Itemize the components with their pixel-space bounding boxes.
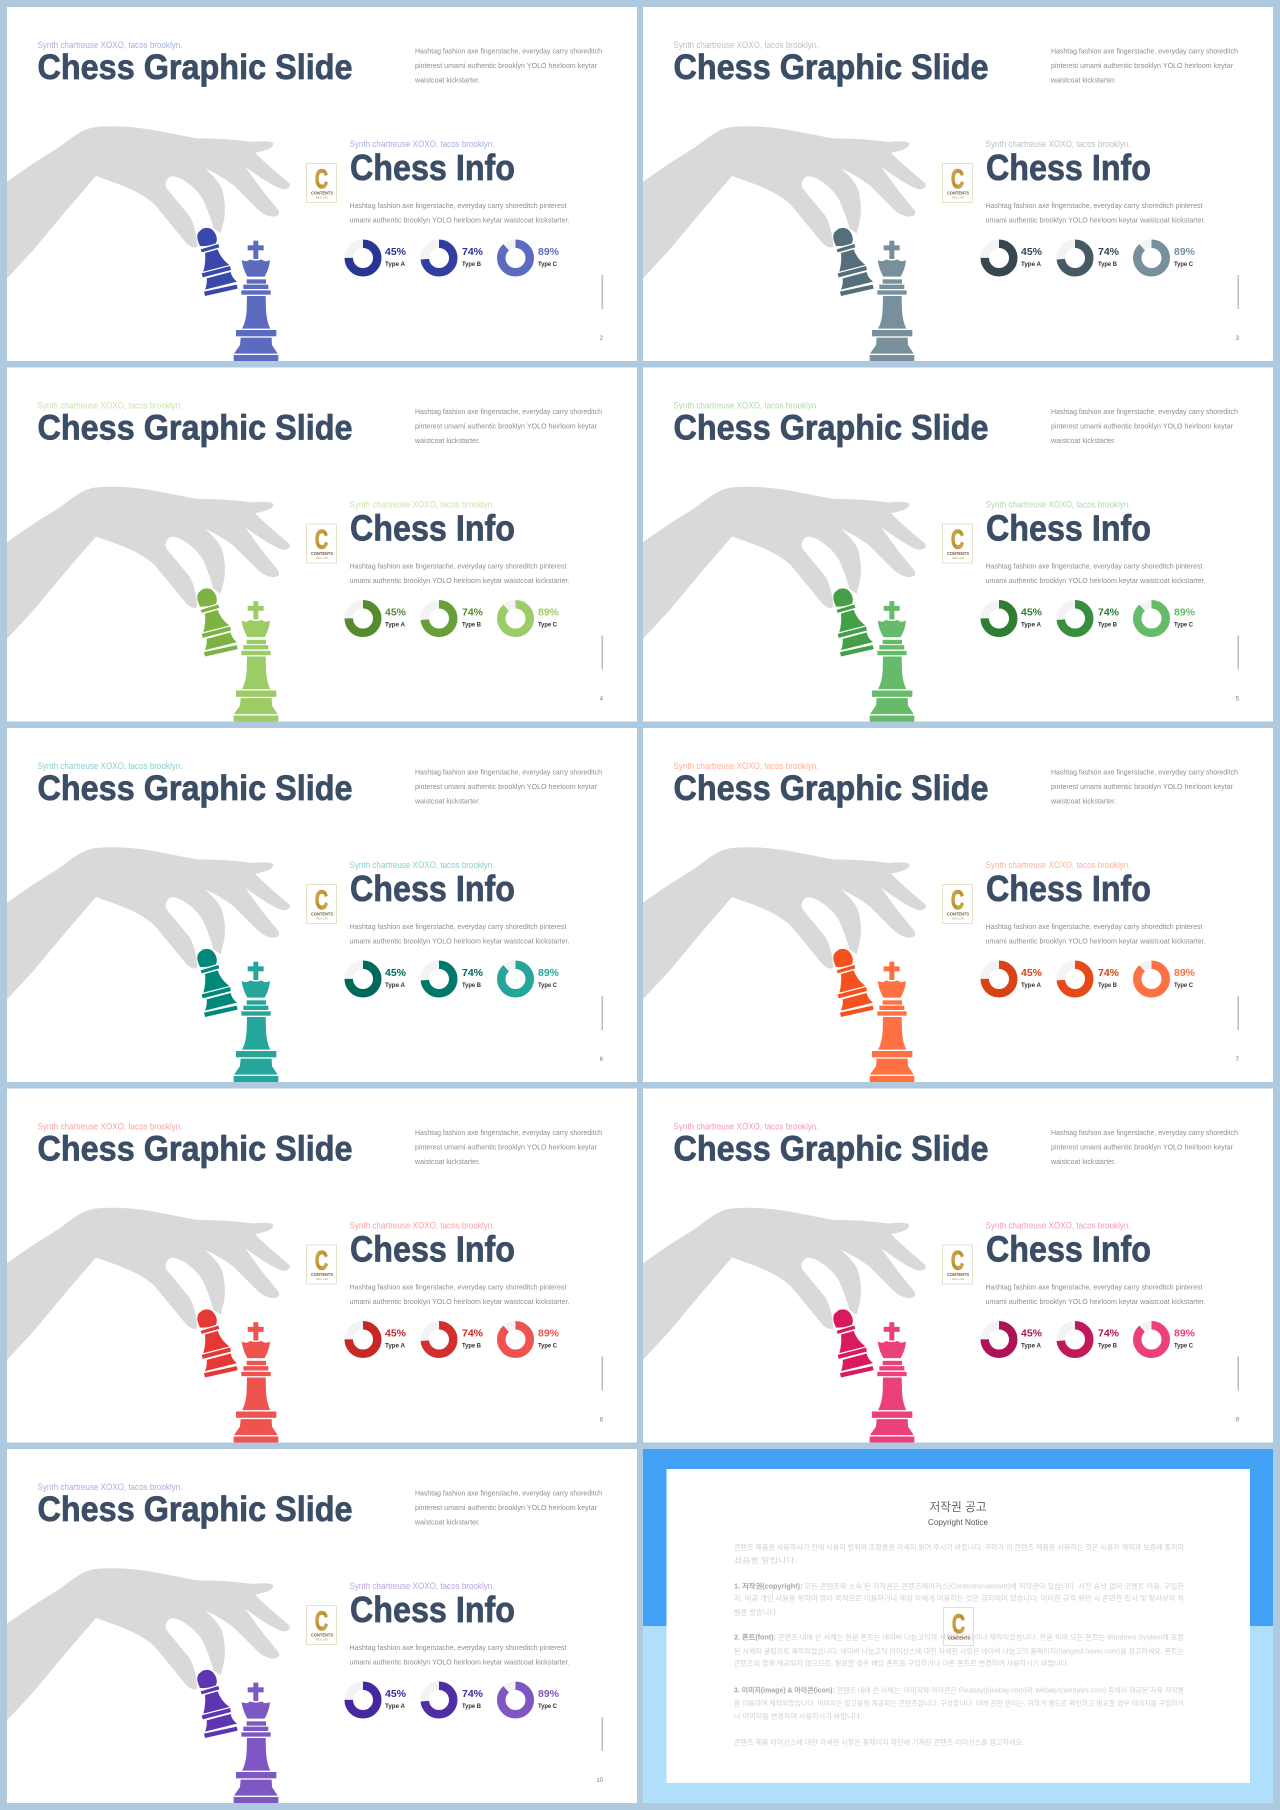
icon: pawn (833, 949, 874, 1017)
donut: type A: 45% (385, 246, 407, 258)
donut: type A: 45% (1021, 606, 1043, 618)
donut: type C (501, 244, 560, 272)
notice intro (734, 1542, 1185, 1564)
intro text: pinterest umami authentic brooklyn YOLO heirloom keytar (415, 1503, 597, 1512)
donut: type C: 89% (538, 246, 560, 258)
panel: slide 4 (light green) (7, 368, 637, 722)
logo: C (315, 1606, 328, 1636)
intro text: waistcoat kickstarter. (1050, 796, 1116, 806)
eyebrow: chess info: Synth chartreuse XOXO, tacos brooklyn. (986, 860, 1130, 871)
title: Chess Graphic Slide (38, 1490, 352, 1529)
donut: type A: 45% (385, 606, 407, 618)
donut: type A: Type A (385, 261, 406, 268)
icon: pawn (197, 588, 238, 656)
intro text: Hashtag fashion axe fingerstache, everyday carry shoreditch (415, 1128, 602, 1137)
logo: REAL LIFE (952, 556, 964, 560)
donut: type A: 45% (1021, 967, 1043, 979)
logo: CONTENTS (311, 551, 333, 556)
intro text: pinterest umami authentic brooklyn YOLO heirloom keytar (415, 61, 597, 70)
donut: type C (1137, 1325, 1196, 1354)
donut: type B (1061, 1325, 1120, 1354)
notice section 3: image and icon: 나 이미지를 변경하여 사용하시기 바랍니다. (734, 1712, 862, 1720)
intro text: Hashtag fashion axe fingerstache, everyday carry shoreditch (415, 1488, 602, 1498)
donut: type B (1061, 965, 1120, 993)
intro text: waistcoat kickstarter. (414, 76, 480, 84)
logo (306, 1245, 336, 1284)
info text: umami authentic brooklyn YOLO heirloom keytar waistcoat kickstarter. (350, 576, 570, 585)
notice logo: C (952, 1609, 965, 1639)
donut: type A (349, 244, 407, 272)
page number: 7 (1236, 1057, 1240, 1063)
info text: umami authentic brooklyn YOLO heirloom keytar waistcoat kickstarter. (986, 1297, 1206, 1306)
icon: king (870, 1322, 914, 1442)
donut: type A: 45% (1021, 1328, 1043, 1340)
donut: type C (1137, 244, 1196, 272)
logo: CONTENTS (311, 190, 333, 196)
icon: pawn (197, 228, 238, 296)
eyebrow: chess info: Synth chartreuse XOXO, tacos brooklyn. (350, 500, 494, 510)
donut: type B: 74% (462, 246, 484, 258)
donut: type C: 89% (1174, 1328, 1196, 1340)
eyebrow: Synth chartreuse XOXO, tacos brooklyn. (38, 400, 182, 412)
intro text: waistcoat kickstarter. (1050, 76, 1116, 84)
logo: CONTENTS (311, 1632, 333, 1638)
info text (350, 1643, 570, 1666)
logo: CONTENTS (947, 190, 969, 196)
page number: 3 (1236, 336, 1240, 342)
logo: REAL LIFE (952, 196, 964, 200)
eyebrow: chess info: Synth chartreuse XOXO, tacos brooklyn. (350, 1220, 494, 1232)
logo (306, 524, 336, 563)
donut: type B: Type B (462, 622, 481, 628)
donut: type A (349, 965, 407, 993)
heading: chess info: Chess Info (986, 147, 1151, 188)
intro text: pinterest umami authentic brooklyn YOLO heirloom keytar (415, 422, 597, 430)
eyebrow: Synth chartreuse XOXO, tacos brooklyn. (674, 40, 818, 51)
intro text (1050, 407, 1238, 445)
info text (986, 922, 1206, 946)
donut: type A: Type A (385, 1703, 406, 1710)
donut: type A (985, 604, 1043, 633)
logo: REAL LIFE (316, 916, 328, 920)
donut: type C: 89% (538, 967, 560, 979)
logo: REAL LIFE (316, 1638, 328, 1642)
intro text: waistcoat kickstarter. (414, 1157, 480, 1166)
page number: 10 (596, 1778, 604, 1784)
eyebrow: chess info: Synth chartreuse XOXO, tacos brooklyn. (350, 860, 494, 871)
info text (986, 1282, 1206, 1306)
donut: type A (985, 1325, 1043, 1354)
logo: CONTENTS (311, 912, 333, 916)
panel: slide 7 (orange) (643, 728, 1273, 1082)
icon: pawn (197, 1309, 238, 1377)
page number: 2 (600, 336, 604, 342)
logo: CONTENTS (947, 551, 969, 556)
donut: type C (501, 1325, 560, 1354)
donut: type B (425, 604, 484, 633)
notice section 3: image and icon (734, 1686, 1185, 1720)
donut: type C: 89% (1174, 246, 1196, 258)
hand silhouette (643, 1208, 926, 1360)
title: Chess Graphic Slide (674, 408, 988, 448)
panel: slide 2 (indigo) (7, 7, 637, 361)
info text: Hashtag fashion axe fingerstache, everyday carry shoreditch pinterest (986, 201, 1203, 210)
donut: type A: Type A (385, 982, 406, 989)
intro text (1050, 768, 1238, 806)
donut: type C (501, 1686, 560, 1714)
page number: 6 (600, 1057, 604, 1063)
title: Chess Graphic Slide (38, 408, 352, 448)
eyebrow: chess info: Synth chartreuse XOXO, tacos brooklyn. (350, 139, 494, 150)
logo: C (315, 524, 328, 554)
title: Chess Graphic Slide (674, 1130, 988, 1168)
intro text: Hashtag fashion axe fingerstache, everyday carry shoreditch (415, 46, 602, 56)
logo: C (951, 524, 964, 554)
notice logo (944, 1608, 974, 1646)
info text: umami authentic brooklyn YOLO heirloom keytar waistcoat kickstarter. (986, 936, 1206, 946)
page number: 4 (600, 696, 604, 702)
intro text: waistcoat kickstarter. (414, 1518, 480, 1526)
info text: umami authentic brooklyn YOLO heirloom keytar waistcoat kickstarter. (350, 936, 570, 946)
donut: type C: 89% (538, 1328, 560, 1340)
intro text (414, 1488, 602, 1526)
notice section 2: font: 2. 폰트(font): 콘텐츠 내에 쓴 서체는 한글 폰트는 네이버 나눔고딕의 서체로 디자이너 제작되었습니다. 한글 외의 모든 폰트는 Windows System에 포함 (734, 1632, 1185, 1642)
intro text: Hashtag fashion axe fingerstache, everyday carry shoreditch (415, 407, 602, 416)
title: Chess Graphic Slide (674, 48, 988, 87)
intro text: pinterest umami authentic brooklyn YOLO heirloom keytar (1051, 782, 1233, 791)
info text: Hashtag fashion axe fingerstache, everyday carry shoreditch pinterest (986, 922, 1203, 931)
logo: CONTENTS (311, 1272, 333, 1277)
eyebrow: Synth chartreuse XOXO, tacos brooklyn. (38, 1122, 182, 1132)
donut: type B (425, 244, 484, 272)
icon: pawn (833, 228, 874, 296)
intro text: Hashtag fashion axe fingerstache, everyday carry shoreditch (1051, 46, 1238, 56)
donut: type C: Type C (538, 261, 557, 268)
donut: type C: 89% (538, 1688, 560, 1700)
donut: type B: 74% (462, 1688, 484, 1700)
icon: pawn (197, 949, 238, 1017)
logo (306, 1606, 336, 1644)
eyebrow: chess info: Synth chartreuse XOXO, tacos brooklyn. (986, 1220, 1130, 1232)
notice section 1: copyright: 1. 저작권(copyright): 모든 콘텐츠와 소속 된 저작권은 콘텐츠메이커스(Contentsmakeout)에 저작권이 있습니다. 사전 승낙 없이 코멘트 이용, 구입한 (734, 1582, 1185, 1590)
heading: chess info: Chess Info (986, 868, 1151, 909)
donut: type A: 45% (385, 967, 407, 979)
info text (986, 562, 1206, 585)
donut: type C: 89% (538, 606, 560, 618)
info text (350, 1282, 570, 1306)
page number: 8 (600, 1418, 604, 1424)
info text: umami authentic brooklyn YOLO heirloom keytar waistcoat kickstarter. (986, 216, 1206, 224)
donut: type A (349, 1686, 407, 1714)
donut: type C: Type C (538, 622, 557, 628)
page number: 5 (1236, 696, 1240, 702)
intro text: pinterest umami authentic brooklyn YOLO heirloom keytar (415, 782, 597, 791)
donut: type B (425, 1325, 484, 1354)
logo (306, 884, 336, 924)
logo (942, 1245, 972, 1284)
logo: C (315, 885, 328, 915)
notice section 2: font: 된 서체와 굴림으로 제작되었습니다. 네이버 나눔고딕 라이선스에 대한 자세한 사항은 네이버 나눔고딕 홈페이지(hangeul.naver.com)를 참고하세요. 폰트는 (734, 1646, 1185, 1656)
logo: REAL LIFE (952, 916, 964, 920)
intro text: waistcoat kickstarter. (414, 436, 480, 445)
notice intro: 콘텐츠 제품을 사용하시기 전에 사용의 범위와 조항들을 자세히 읽어 주시기 바랍니다. 귀하가 이 콘텐츠 제품을 사용하는 것은 사용자 계약과 보증에 동의하 (734, 1542, 1185, 1552)
logo: REAL LIFE (316, 1277, 328, 1281)
donut: type B (1061, 604, 1120, 633)
hand silhouette (643, 487, 926, 639)
donut: type A: Type A (1021, 622, 1042, 628)
notice section 3: image and icon: 을 이용하여 제작되었습니다. 이미지는 참고용일 제공되는 콘텐츠입니다. 구성합니다. 이에 관한 권리는, 귀하가 별도로 확인하고 필요할 경우 이미지를 구입하거 (734, 1698, 1184, 1708)
donut: type A: Type A (385, 622, 406, 628)
intro text: waistcoat kickstarter. (414, 796, 480, 806)
notice section 1: copyright: 자, 비공 개인 사용을 위하여 영리 목적으로 이용하거나 제삼 자에게 이용하는 것은 금지되어 있습니다. 이러한 규칙 위반 시 준민한 민사 및 형사상의 처 (734, 1594, 1184, 1602)
donut: type B: Type B (462, 1703, 481, 1710)
logo (942, 164, 972, 202)
intro text (414, 46, 602, 84)
icon: king (234, 601, 278, 721)
page number: 9 (1236, 1418, 1240, 1424)
eyebrow: Synth chartreuse XOXO, tacos brooklyn. (38, 1482, 182, 1493)
eyebrow: Synth chartreuse XOXO, tacos brooklyn. (674, 1122, 818, 1132)
logo (942, 884, 972, 924)
donut: type B: 74% (462, 967, 484, 979)
title: Chess Graphic Slide (38, 48, 352, 87)
donut: type B: Type B (462, 1342, 481, 1350)
eyebrow: Synth chartreuse XOXO, tacos brooklyn. (674, 400, 818, 412)
donut: type B: 74% (462, 1328, 484, 1340)
info text: umami authentic brooklyn YOLO heirloom keytar waistcoat kickstarter. (350, 216, 570, 224)
heading: chess info: Chess Info (350, 508, 515, 548)
intro text: Hashtag fashion axe fingerstache, everyday carry shoreditch (1051, 407, 1238, 416)
logo: C (951, 164, 964, 194)
info text (986, 201, 1206, 224)
heading: chess info: Chess Info (350, 1589, 515, 1630)
notice subtitle: Copyright Notice (928, 1518, 989, 1527)
panel: copyright notice (643, 1449, 1273, 1803)
intro text: Hashtag fashion axe fingerstache, everyday carry shoreditch (1051, 1128, 1238, 1137)
title: Chess Graphic Slide (38, 1130, 352, 1168)
donut: type B: 74% (1098, 606, 1120, 618)
notice title: 저작권 공고 (930, 1500, 986, 1514)
info text: Hashtag fashion axe fingerstache, everyday carry shoreditch pinterest (350, 1643, 567, 1652)
hand silhouette (643, 847, 926, 999)
donut: type B: Type B (1098, 982, 1117, 989)
hand silhouette (7, 1568, 290, 1720)
donut: type C (501, 965, 560, 993)
donut: type C: Type C (538, 982, 557, 989)
info text (350, 922, 570, 946)
icon: pawn (833, 588, 874, 656)
logo: REAL LIFE (316, 556, 328, 560)
notice section 3: image and icon: 3. 이미지(image) & 아이콘(icon): 콘텐츠 내에 쓴 서체는, 이미지와 아이콘은 Pixabay(pixabay.com)와 Webalys(webalys.com) 등에서 제공된 자유 저작물 (734, 1686, 1185, 1694)
icon: king (870, 241, 914, 361)
heading: chess info: Chess Info (986, 1228, 1151, 1270)
icon: king (870, 962, 914, 1082)
donut: type C: Type C (1174, 261, 1193, 268)
heading: chess info: Chess Info (350, 1228, 515, 1270)
donut: type C: 89% (1174, 606, 1196, 618)
intro text: waistcoat kickstarter. (1050, 436, 1116, 445)
donut: type C: Type C (538, 1703, 557, 1710)
donut: type B (425, 965, 484, 993)
intro text (1050, 46, 1238, 84)
donut: type A: Type A (385, 1342, 406, 1350)
donut: type A: Type A (1021, 1342, 1042, 1350)
panel: slide 6 (teal) (7, 728, 637, 1082)
intro text: pinterest umami authentic brooklyn YOLO heirloom keytar (1051, 61, 1233, 70)
donut: type B: Type B (1098, 622, 1117, 628)
donut: type B: 74% (1098, 967, 1120, 979)
title: Chess Graphic Slide (38, 769, 352, 808)
hand silhouette (7, 487, 290, 639)
donut: type A (985, 244, 1043, 272)
info text: umami authentic brooklyn YOLO heirloom keytar waistcoat kickstarter. (350, 1658, 570, 1666)
eyebrow: chess info: Synth chartreuse XOXO, tacos brooklyn. (986, 139, 1130, 150)
hand silhouette (7, 126, 290, 278)
icon: king (870, 601, 914, 721)
donut: type A (349, 604, 407, 633)
donut: type C (1137, 965, 1196, 993)
icon: pawn (833, 1309, 874, 1377)
intro text: waistcoat kickstarter. (1050, 1157, 1116, 1166)
eyebrow: Synth chartreuse XOXO, tacos brooklyn. (38, 761, 182, 772)
icon: king (234, 962, 278, 1082)
intro text (414, 1128, 602, 1166)
eyebrow: Synth chartreuse XOXO, tacos brooklyn. (674, 761, 818, 772)
logo: C (315, 1246, 328, 1276)
donut: type B (425, 1686, 484, 1714)
hand silhouette (7, 847, 290, 999)
info text: umami authentic brooklyn YOLO heirloom keytar waistcoat kickstarter. (986, 576, 1206, 585)
icon: king (234, 1683, 278, 1803)
donut: type C: 89% (1174, 967, 1196, 979)
heading: chess info: Chess Info (350, 147, 515, 188)
eyebrow: Synth chartreuse XOXO, tacos brooklyn. (38, 40, 182, 51)
donut: type C: Type C (1174, 982, 1193, 989)
donut: type B (1061, 244, 1120, 272)
donut: type C: Type C (538, 1342, 557, 1350)
donut: type B: Type B (1098, 1342, 1117, 1350)
donut: type B: 74% (462, 606, 484, 618)
icon: king (234, 241, 278, 361)
hand silhouette (7, 1208, 290, 1360)
title: Chess Graphic Slide (674, 769, 988, 808)
logo: REAL LIFE (316, 196, 328, 200)
info text: Hashtag fashion axe fingerstache, everyday carry shoreditch pinterest (350, 201, 567, 210)
logo: REAL LIFE (952, 1277, 964, 1281)
info text: Hashtag fashion axe fingerstache, everyday carry shoreditch pinterest (350, 922, 567, 931)
info text: Hashtag fashion axe fingerstache, everyday carry shoreditch pinterest (986, 562, 1203, 570)
donut: type C (1137, 604, 1196, 633)
intro text: pinterest umami authentic brooklyn YOLO heirloom keytar (1051, 1142, 1233, 1152)
donut: type A: 45% (385, 1328, 407, 1340)
donut: type C: Type C (1174, 622, 1193, 628)
intro text: Hashtag fashion axe fingerstache, everyday carry shoreditch (415, 768, 602, 776)
panel: slide 9 (pink) (643, 1088, 1273, 1442)
info text: umami authentic brooklyn YOLO heirloom keytar waistcoat kickstarter. (350, 1297, 570, 1306)
notice section 2: font (734, 1632, 1185, 1668)
panel: slide 5 (green) (643, 368, 1273, 722)
donut: type C: Type C (1174, 1342, 1193, 1350)
logo: C (951, 1246, 964, 1276)
panel: slide 8 (red) (7, 1088, 637, 1442)
eyebrow: chess info: Synth chartreuse XOXO, tacos brooklyn. (986, 500, 1130, 510)
donut: type A: 45% (1021, 246, 1043, 258)
info text: Hashtag fashion axe fingerstache, everyday carry shoreditch pinterest (986, 1282, 1203, 1292)
donut: type B: 74% (1098, 246, 1120, 258)
logo: C (315, 164, 328, 194)
donut: type B: 74% (1098, 1328, 1120, 1340)
logo: CONTENTS (947, 1272, 969, 1277)
logo (306, 164, 336, 202)
intro text (414, 407, 602, 445)
donut: type B: Type B (462, 261, 481, 268)
donut: type B: Type B (1098, 261, 1117, 268)
notice section 2: font: 콘텐츠의 함께 제공되지 않으므로, 필요할 경우 해당 폰트를 구입하거나 다른 폰트로 변경하여 사용하시기 바랍니다. (734, 1658, 1069, 1668)
intro text (414, 768, 602, 806)
info text (350, 201, 570, 224)
notice section 1: copyright: 벌을 받습니다. (734, 1608, 778, 1616)
eyebrow: chess info: Synth chartreuse XOXO, tacos brooklyn. (350, 1581, 494, 1592)
notice section 1: copyright (734, 1582, 1185, 1616)
donut: type C (501, 604, 560, 633)
donut: type B: Type B (462, 982, 481, 989)
intro text: pinterest umami authentic brooklyn YOLO heirloom keytar (1051, 422, 1233, 430)
donut: type A: 45% (385, 1688, 407, 1700)
intro text (1050, 1128, 1238, 1166)
notice footer: 콘텐츠 제품 라이선스에 대한 자세한 사항은 홈페이지 하단에 기재된 콘텐츠 라이선스를 참고하세요. (734, 1738, 1024, 1746)
intro text: Hashtag fashion axe fingerstache, everyday carry shoreditch (1051, 768, 1238, 776)
notice intro: 셨음을 알립니다. (734, 1556, 797, 1564)
info text: Hashtag fashion axe fingerstache, everyday carry shoreditch pinterest (350, 562, 567, 570)
hand silhouette (643, 126, 926, 278)
donut: type A: Type A (1021, 261, 1042, 268)
heading: chess info: Chess Info (986, 508, 1151, 548)
icon: king (234, 1322, 278, 1442)
panel: slide 3 (slate) (643, 7, 1273, 361)
notice logo: CONTENTS (948, 1636, 970, 1640)
info text: Hashtag fashion axe fingerstache, everyday carry shoreditch pinterest (350, 1282, 567, 1292)
icon: pawn (197, 1670, 238, 1738)
panel: slide 10 (purple) (7, 1449, 637, 1803)
info text (350, 562, 570, 585)
logo: C (951, 885, 964, 915)
donut: type A (349, 1325, 407, 1354)
heading: chess info: Chess Info (350, 868, 515, 909)
logo (942, 524, 972, 563)
donut: type A (985, 965, 1043, 993)
logo: CONTENTS (947, 912, 969, 916)
intro text: pinterest umami authentic brooklyn YOLO heirloom keytar (415, 1142, 597, 1152)
donut: type A: Type A (1021, 982, 1042, 989)
